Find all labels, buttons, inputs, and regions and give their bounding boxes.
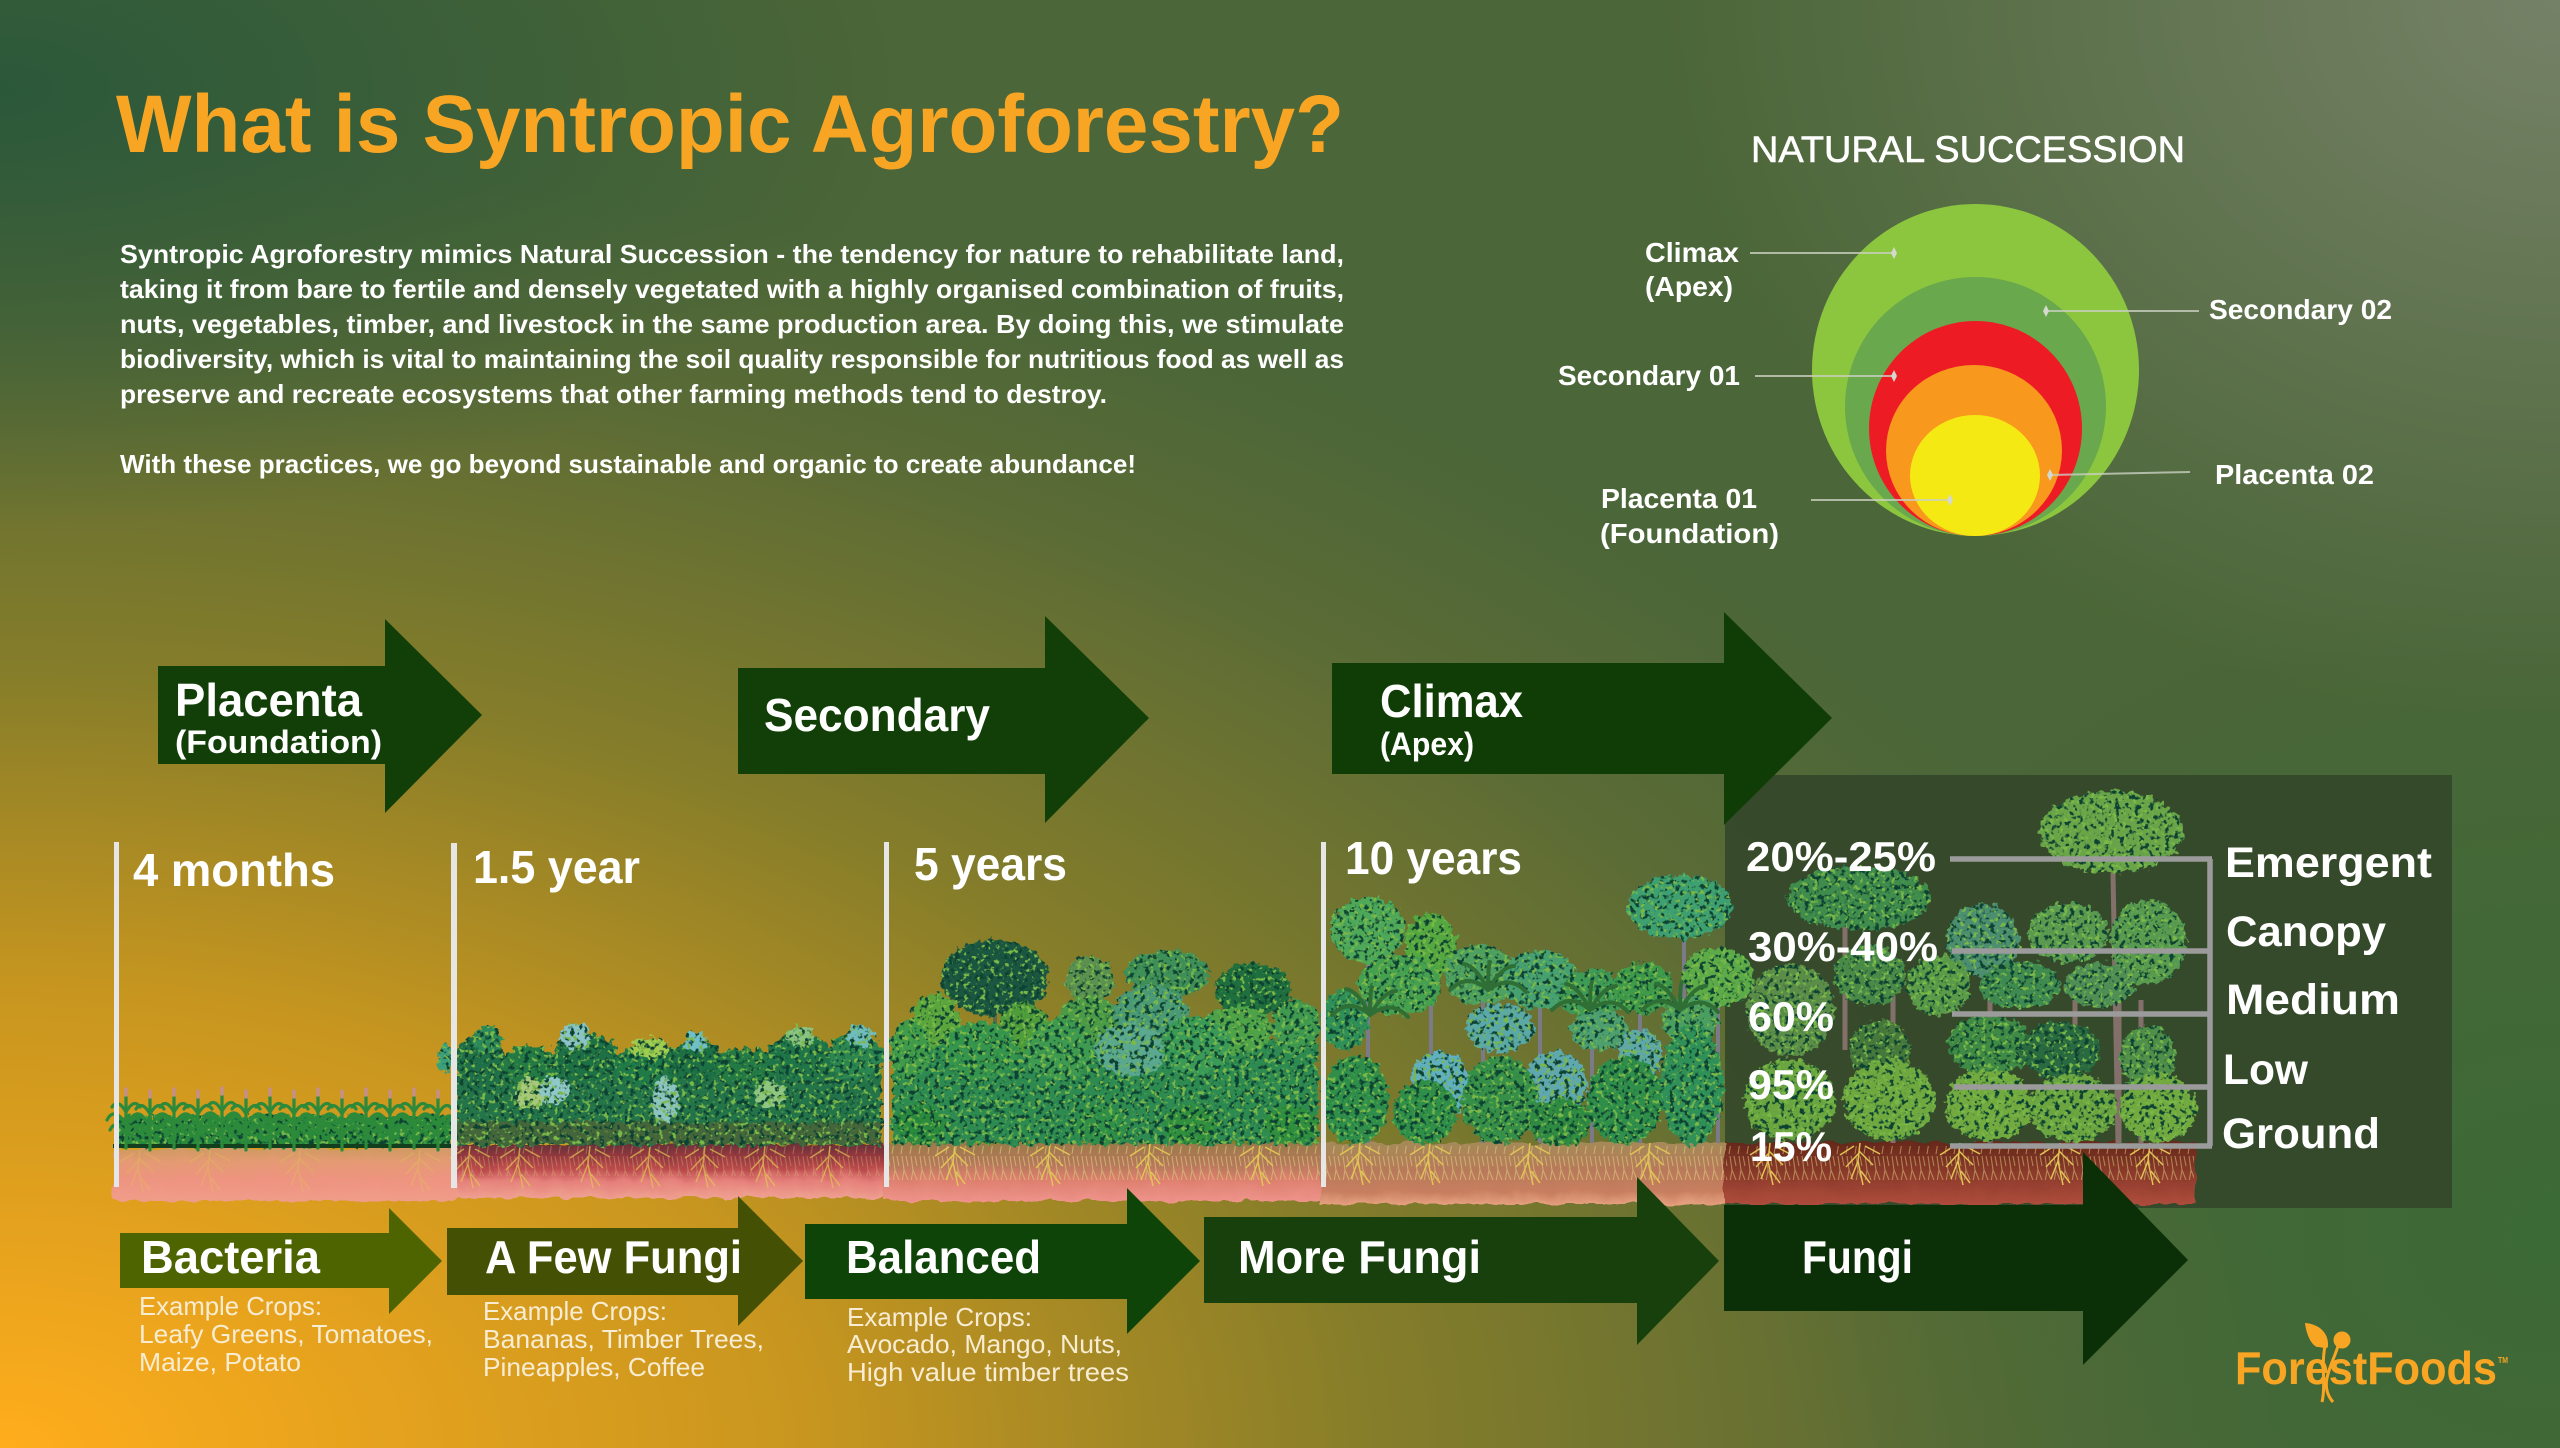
arrow: a few fungi [447, 1196, 803, 1326]
strata names [2222, 839, 2432, 1158]
arrow labels: stages: (Foundation) [175, 724, 382, 760]
time labels: 10 years [1345, 832, 1522, 884]
arrow: secondary [738, 616, 1149, 823]
crops: 5 years vegetation [890, 940, 1320, 1145]
intro text block: Syntropic Agroforestry mimics Natural Succession - the tendency for nature to rehabilitate land, [120, 239, 1344, 269]
succession labels: Secondary 01 [1558, 360, 1740, 391]
example crops: bacteria: Maize, Potato [139, 1347, 301, 1377]
strata names: Ground [2222, 1110, 2380, 1158]
layer: placenta 01 [1910, 415, 2040, 536]
fungal stage labels: Bacteria [141, 1231, 320, 1283]
crops: 10 years vegetation [1321, 875, 1754, 1146]
succession labels: Climax [1645, 237, 1739, 268]
succession labels: Placenta 02 [2215, 459, 2374, 490]
succession labels: Secondary 02 [2209, 294, 2392, 325]
intro text block: preserve and recreate ecosystems that other farming methods tend to destroy. [120, 379, 1107, 409]
example crops: a few fungi: Bananas, Timber Trees, [483, 1324, 764, 1354]
fungal stage labels: Balanced [846, 1231, 1041, 1283]
arrow: balanced [805, 1188, 1200, 1334]
example crops: bacteria: Example Crops: [139, 1291, 322, 1321]
succession labels: (Foundation) [1600, 518, 1779, 549]
time labels: 5 years [914, 838, 1067, 890]
panel: forest strata [1725, 775, 2452, 1208]
arrow labels: stages: (Apex) [1380, 726, 1474, 762]
time labels [133, 832, 1522, 896]
intro text block: taking it from bare to fertile and densely vegetated with a highly organised combination of fruits, [120, 274, 1344, 304]
strata percentages: 60% [1748, 993, 1834, 1040]
layer: placenta 02 [1886, 365, 2062, 536]
layer: secondary 01 [1869, 321, 2082, 536]
example crops: balanced: High value timber trees [847, 1357, 1129, 1387]
succession labels: (Apex) [1645, 271, 1733, 302]
arrow labels: stages: Secondary [764, 689, 990, 741]
strata bracket lines [1950, 859, 2212, 1146]
crops: 4 months maize [107, 1088, 457, 1150]
arrow labels: stages [175, 674, 1523, 762]
succession labels [1558, 237, 2392, 549]
fungal stage labels: More Fungi [1238, 1231, 1481, 1283]
intro text block: With these practices, we go beyond sustainable and organic to create abundance! [120, 449, 1136, 479]
arrow: placenta [158, 619, 482, 813]
strata names: Emergent [2225, 839, 2432, 887]
leader lines [1750, 247, 2199, 506]
fungal stage labels: Fungi [1802, 1231, 1913, 1283]
arrow labels: stages: Placenta [175, 674, 362, 726]
fungal stage labels [141, 1231, 1913, 1283]
time labels: 1.5 year [473, 841, 640, 893]
strata percentages [1746, 833, 1938, 1170]
strata percentages: 15% [1750, 1123, 1832, 1170]
logo: ForestFoods: TM [2498, 1356, 2508, 1365]
example crops: bacteria: Leafy Greens, Tomatoes, [139, 1319, 433, 1349]
example crops: bacteria [139, 1291, 433, 1377]
intro text block: nuts, vegetables, timber, and livestock in the same production area. By doing this, we stimulate [120, 309, 1344, 339]
crops: mature forest [1744, 791, 2196, 1143]
example crops: a few fungi: Example Crops: [483, 1296, 667, 1326]
strata percentages: 30%-40% [1748, 923, 1938, 970]
time labels: 4 months [133, 844, 335, 896]
fungal stage labels: A Few Fungi [485, 1231, 742, 1283]
strata names: Medium [2226, 976, 2400, 1024]
arrow: fungi [1724, 1152, 2188, 1365]
time markers [114, 842, 1326, 1188]
natural succession nested diagram [1812, 204, 2139, 536]
intro text block: biodiversity, which is vital to maintaining the soil quality responsible for nutritious food as well as [120, 344, 1344, 374]
title: What is Syntropic Agroforestry? [116, 79, 1344, 170]
natural succession heading: NATURAL SUCCESSION [1751, 129, 2185, 170]
arrow: bacteria [120, 1208, 442, 1314]
logo: ForestFoods [2235, 1323, 2508, 1402]
arrow: climax [1332, 612, 1832, 825]
strata percentages: 95% [1748, 1061, 1834, 1108]
strata names: Canopy [2226, 908, 2386, 956]
succession labels: Placenta 01 [1601, 483, 1757, 514]
soil band [113, 1142, 2196, 1204]
strata percentages: 20%-25% [1746, 833, 1936, 880]
example crops: balanced: Avocado, Mango, Nuts, [847, 1329, 1122, 1359]
intro text block [120, 239, 1344, 479]
example crops: a few fungi [483, 1296, 764, 1382]
arrow: more fungi [1204, 1177, 1719, 1345]
strata names: Low [2223, 1046, 2309, 1094]
layer: secondary 02 [1845, 277, 2106, 536]
roots [120, 1143, 2194, 1192]
example crops: balanced: Example Crops: [847, 1302, 1032, 1332]
example crops: balanced [847, 1302, 1129, 1387]
logo: ForestFoods: ForestFoods [2235, 1342, 2497, 1394]
layer: climax [1812, 204, 2139, 536]
example crops: a few fungi: Pineapples, Coffee [483, 1352, 705, 1382]
crops: 1.5 year vegetation [437, 1023, 883, 1145]
arrow labels: stages: Climax [1380, 675, 1523, 727]
